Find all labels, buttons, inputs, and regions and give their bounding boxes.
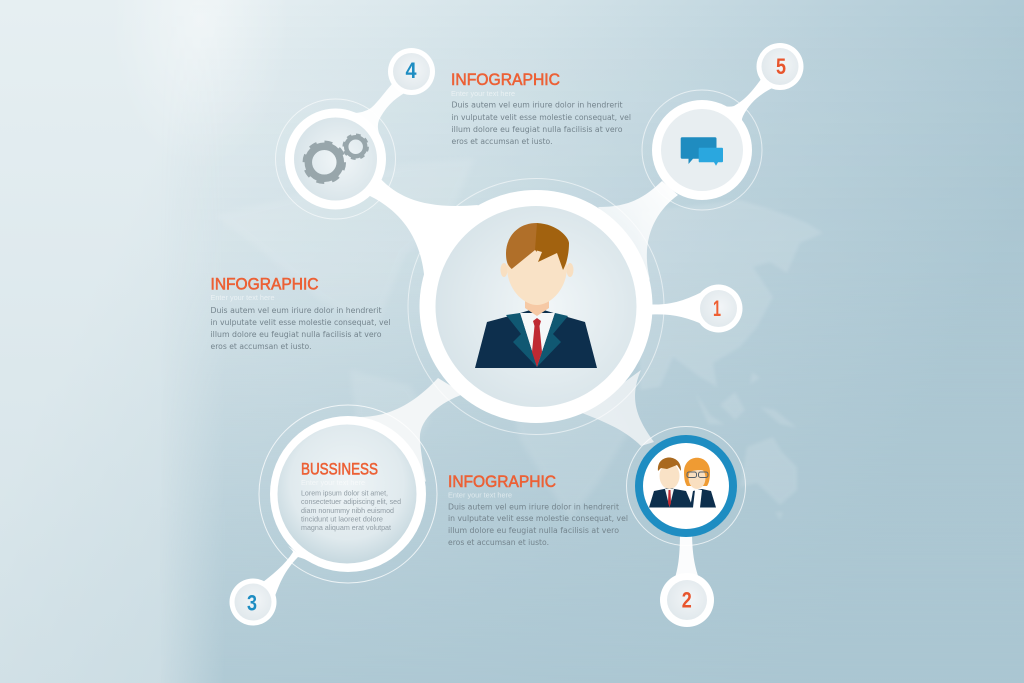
gears circle: [276, 99, 396, 219]
icon: team: [649, 458, 716, 508]
text block: bussiness: Lorem ipsum dolor sit amet,: [301, 488, 388, 498]
number badge 2: 2: [682, 588, 692, 613]
text block: bottom: Enter your text here: [448, 490, 512, 500]
text block: bussiness: [301, 488, 401, 532]
heading: bussiness: BUSSINESS: [301, 460, 378, 478]
world map: left: [215, 158, 630, 520]
team circle: [626, 426, 746, 546]
number badge 4: 4: [406, 58, 417, 83]
text block: bussiness: diam nonummy nibh euismod: [301, 506, 394, 515]
text block: top: illum dolore eu feugiat nulla facilisis at vero: [452, 124, 622, 134]
text block: bottom: [448, 472, 628, 547]
text block: bussiness: magna aliquam erat volutpat: [301, 523, 391, 532]
world map: right: [640, 200, 823, 520]
connector: centre to 1: [645, 290, 706, 326]
number badge 5: [756, 43, 804, 90]
number badge 3: 3: [247, 590, 257, 616]
text block: left: in vulputate velit esse molestie consequat, vel: [210, 317, 390, 327]
text block: top: [451, 70, 631, 146]
chat circle: [642, 90, 762, 210]
text block: left: eros et accumsan et iusto.: [210, 341, 312, 351]
text block: bottom: eros et accumsan et iusto.: [448, 537, 549, 547]
icon: gears: [305, 135, 367, 182]
icon: businessman: [475, 223, 597, 368]
number badge 2: [660, 573, 714, 627]
text block: top: INFOGRAPHIC: [451, 70, 560, 89]
central circle: person: [408, 178, 664, 434]
icon: chat bubbles: [681, 137, 723, 166]
connector: team to 2: [670, 530, 704, 592]
number badge 5: 5: [776, 54, 786, 79]
connector: chat to 5: [718, 72, 776, 130]
text block: top: Enter your text here: [451, 89, 515, 98]
text block: bottom: INFOGRAPHIC: [448, 472, 556, 491]
number badge 1: [694, 284, 742, 332]
connector: centre to team: [582, 370, 654, 446]
text block: bussiness: tincidunt ut laoreet dolore: [301, 514, 383, 524]
text block: top: Duis autem vel eum iriure dolor in hendrerit: [452, 100, 623, 110]
text block: top: eros et accumsan et iusto.: [452, 136, 552, 146]
bussiness circle: [259, 405, 437, 583]
number badge 1: 1: [713, 296, 721, 321]
text block: left: INFOGRAPHIC: [210, 274, 318, 294]
text block: bottom: illum dolore eu feugiat nulla facilisis at vero: [448, 525, 619, 535]
text block: bottom: Duis autem vel eum iriure dolor in hendrerit: [448, 502, 620, 512]
connector: gears to 4: [352, 76, 410, 138]
text block: bussiness: consectetuer adipiscing elit, sed: [301, 497, 401, 506]
number badge 4: [388, 48, 435, 95]
connector: bussiness to 3: [258, 546, 310, 606]
subheading: bussiness: Enter your text here: [301, 478, 365, 487]
number badge 3: [230, 578, 276, 626]
text block: top: in vulputate velit esse molestie consequat, vel: [452, 112, 631, 122]
text block: bottom: in vulputate velit esse molestie consequat, vel: [448, 513, 628, 523]
text block: left: [210, 274, 390, 351]
connector: centre to chat: [598, 181, 678, 280]
text block: left: Enter your text here: [210, 293, 274, 302]
connector: centre to bussiness: [358, 378, 464, 482]
connector: centre to gears: [368, 176, 478, 288]
text block: left: Duis autem vel eum iriure dolor in hendrerit: [210, 305, 382, 315]
text block: left: illum dolore eu feugiat nulla facilisis at vero: [210, 329, 382, 339]
